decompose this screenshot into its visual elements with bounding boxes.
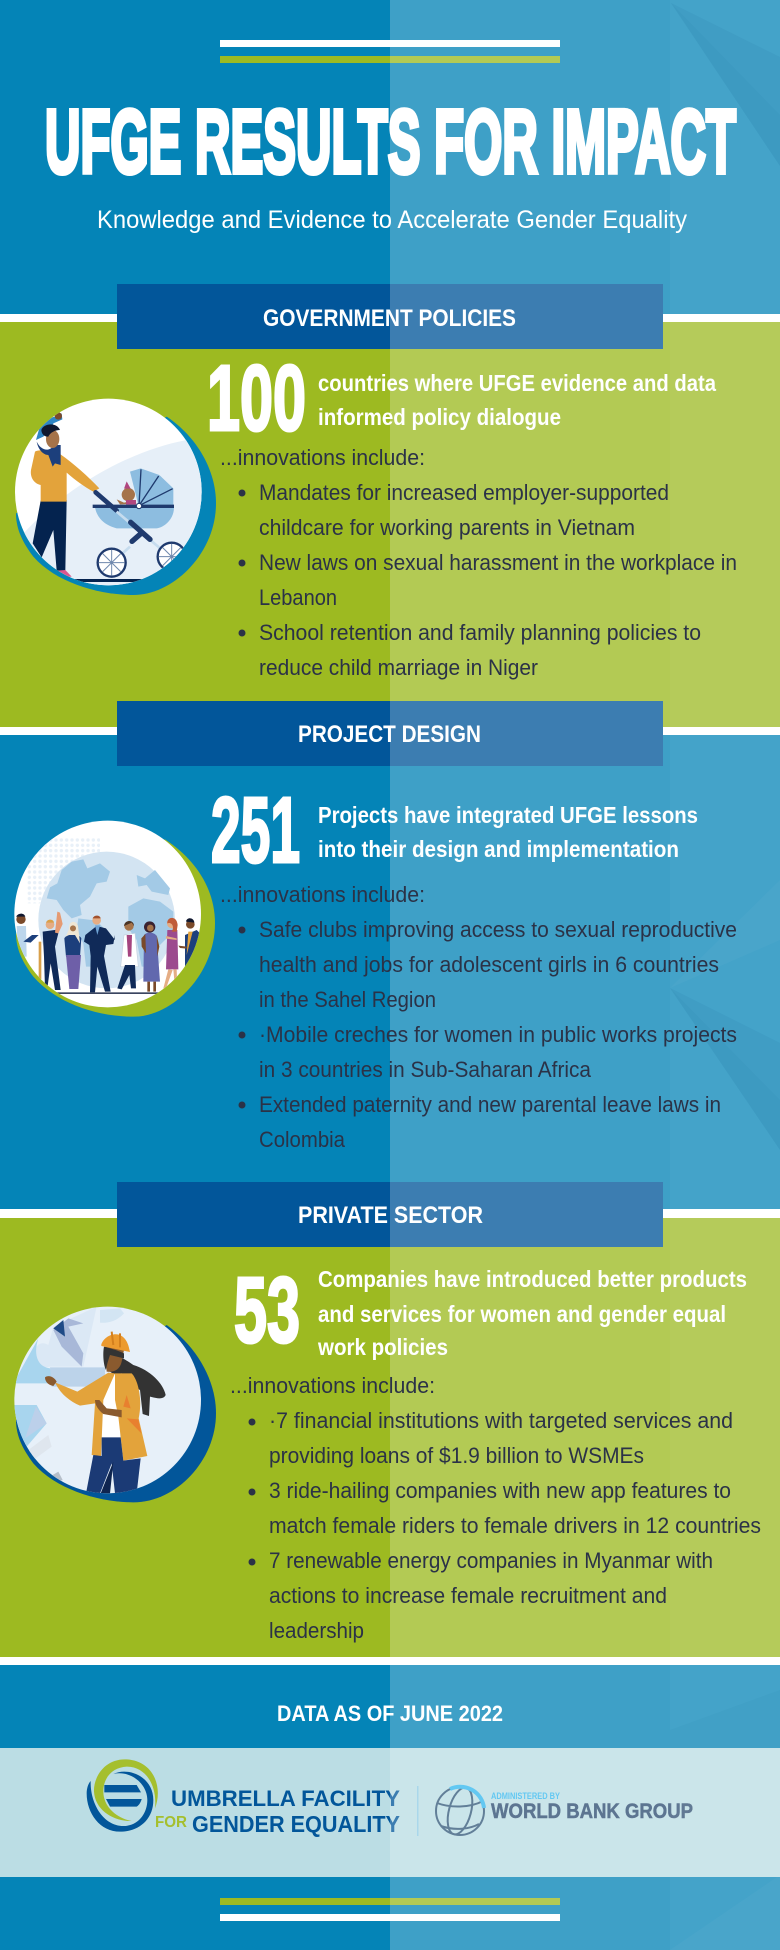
- stat: 251: 251: [211, 778, 300, 882]
- logo: umbrella facility for gender equality: FOR: [155, 1814, 187, 1831]
- innovations list: project design: health and jobs for adolescent girls in 6 countries: [259, 952, 719, 977]
- illustration: father with stroller: [15, 399, 216, 595]
- background light overlay: [390, 0, 780, 1950]
- innovations list: government policies: Lebanon: [259, 585, 337, 610]
- innovations list: private sector: match female riders to female drivers in 12 countries: [269, 1513, 761, 1538]
- heading: private sector: PRIVATE SECTOR: [298, 1202, 483, 1229]
- innovations list: government policies: childcare for working parents in Vietnam: [259, 515, 635, 540]
- logo: world bank group: [436, 1785, 693, 1837]
- innovations list: private sector: ...innovations include:: [230, 1373, 435, 1398]
- logo: umbrella facility for gender equality: UMBRELLA FACILITY: [171, 1786, 400, 1811]
- heading: government policies: GOVERNMENT POLICIES: [263, 305, 516, 332]
- stat description: projects: into their design and implementation: [318, 836, 679, 862]
- innovations list: project design: Safe clubs improving access to sexual reproductive: [259, 917, 737, 942]
- innovations list: private sector: 7 renewable energy companies in Myanmar with: [269, 1548, 713, 1573]
- innovations list: project design: ...innovations include:: [220, 882, 425, 907]
- innovations list: government policies: [220, 445, 737, 680]
- logo band: [0, 1748, 780, 1877]
- logo: world bank group: WORLD BANK GROUP: [491, 1800, 693, 1823]
- stat: 53: 53: [234, 1258, 300, 1362]
- innovations list: project design: in 3 countries in Sub-Saharan Africa: [259, 1057, 592, 1082]
- stat description: countries: countries where UFGE evidence and data: [318, 370, 716, 396]
- stat description: countries: [318, 370, 716, 430]
- stat description: countries: informed policy dialogue: [318, 404, 561, 430]
- top green bar: [220, 56, 560, 63]
- logo: umbrella facility for gender equality: [87, 1759, 400, 1837]
- heading: project design: PROJECT DESIGN: [298, 721, 481, 748]
- innovations list: government policies: School retention and family planning policies to: [259, 620, 701, 645]
- innovations list: government policies: ...innovations include:: [220, 445, 425, 470]
- innovations list: project design: Extended paternity and new parental leave laws in: [259, 1092, 721, 1117]
- logo: world bank group: ADMINISTERED BY: [491, 1791, 560, 1801]
- stat description: companies: and services for women and gender equal: [318, 1301, 726, 1327]
- innovations list: private sector: leadership: [269, 1618, 364, 1643]
- bottom white bar: [220, 1914, 560, 1921]
- innovations list: private sector: providing loans of $1.9 billion to WSMEs: [269, 1443, 644, 1468]
- logo: umbrella facility for gender equality: GENDER EQUALITY: [192, 1811, 400, 1837]
- top white bar: [220, 40, 560, 47]
- stat: 100: 100: [207, 346, 306, 450]
- innovations list: private sector: 3 ride-hailing companies with new app features to: [269, 1478, 731, 1503]
- innovations list: private sector: actions to increase female recruitment and: [269, 1583, 667, 1608]
- stat description: projects: [318, 802, 698, 862]
- subtitle: Knowledge and Evidence to Accelerate Gender Equality: [97, 206, 687, 234]
- innovations list: project design: Colombia: [259, 1127, 346, 1152]
- innovations list: government policies: New laws on sexual harassment in the workplace in: [259, 550, 737, 575]
- stat description: companies: [317, 1266, 747, 1360]
- innovations list: private sector: ·7 financial institutions with targeted services and: [269, 1408, 733, 1433]
- illustration: woman in hard hat: [13, 1307, 216, 1502]
- innovations list: project design: ·Mobile creches for women in public works projects: [259, 1022, 737, 1047]
- stat description: companies: work policies: [317, 1334, 448, 1360]
- innovations list: project design: [220, 882, 737, 1152]
- data date note: DATA AS OF JUNE 2022: [277, 1701, 503, 1726]
- header bar: private sector: [117, 1182, 663, 1247]
- innovations list: government policies: reduce child marriage in Niger: [259, 655, 538, 680]
- innovations list: government policies: Mandates for increased employer-supported: [259, 480, 669, 505]
- header bar: government policies: [117, 284, 663, 349]
- stat description: projects: Projects have integrated UFGE lessons: [318, 802, 698, 828]
- header bar: project design: [117, 701, 663, 766]
- innovations list: private sector: [230, 1373, 761, 1643]
- illustration: globe with people: [14, 821, 215, 1017]
- innovations list: project design: in the Sahel Region: [259, 987, 436, 1012]
- bottom green bar: [220, 1898, 560, 1905]
